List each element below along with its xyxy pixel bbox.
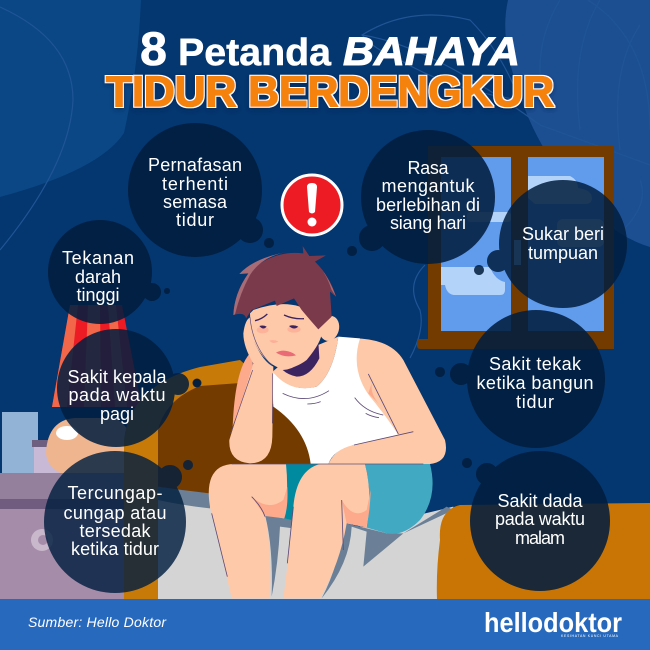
- title: [106, 22, 554, 116]
- bubble: Sakit tekak ketika bangun tidur: [435, 310, 605, 448]
- bubble: Tekanan darah tinggi: Tekanan: [62, 248, 134, 268]
- warning icon: [282, 175, 342, 235]
- bottles on dresser: [2, 412, 63, 473]
- bubble: Pernafasan terhenti semasa tidur: terhenti: [162, 174, 228, 194]
- bubble: Sakit dada pada waktu malam: malam: [515, 528, 565, 548]
- bubble: Sakit dada pada waktu malam: Sakit dada: [498, 491, 583, 511]
- bubble: Pernafasan terhenti semasa tidur: tidur: [176, 210, 214, 230]
- bubble: Sakit dada pada waktu malam: [462, 451, 610, 591]
- bubble: Sukar beri tumpuan: Sukar beri: [522, 224, 604, 244]
- bubble: Rasa mengantuk berlebihan di siang hari: siang hari: [390, 213, 466, 233]
- bubble: Tekanan darah tinggi: darah: [75, 267, 121, 287]
- source credit: Sumber: Hello Doktor: [28, 614, 167, 630]
- bubble: Tercungap-cungap atau tersedak ketika tidur: [44, 451, 193, 593]
- man sitting on bed: [209, 246, 446, 598]
- bubble: Pernafasan terhenti semasa tidur: semasa: [163, 192, 228, 212]
- bubble: Pernafasan terhenti semasa tidur: Pernafasan: [148, 155, 242, 175]
- hair: [233, 246, 336, 329]
- tank top: [272, 337, 413, 464]
- title: BAHAYA: [343, 30, 520, 74]
- bubble: Tekanan darah tinggi: [48, 220, 170, 324]
- bubble: Sakit tekak ketika bangun tidur: Sakit tekak: [489, 354, 582, 374]
- bubble: Sakit tekak ketika bangun tidur: tidur: [516, 392, 554, 412]
- bubble: Tercungap-cungap atau tersedak ketika tidur: cungap atau: [64, 503, 166, 523]
- bubble: Sakit kepala pada waktu pagi: pada waktu: [68, 385, 166, 405]
- title: Petanda: [178, 32, 332, 74]
- bubble: Rasa mengantuk berlebihan di siang hari: berlebihan di: [376, 195, 480, 215]
- logo: hellodoktor: hellodoktor: [484, 607, 622, 638]
- bubble: Tercungap-cungap atau tersedak ketika tidur: tersedak: [80, 521, 152, 541]
- bubble: Rasa mengantuk berlebihan di siang hari: [347, 130, 495, 264]
- bubble: Tekanan darah tinggi: tinggi: [76, 285, 120, 305]
- bubble: Sukar beri tumpuan: [474, 180, 627, 308]
- shorts: [284, 464, 433, 534]
- headboard: [124, 360, 330, 600]
- bubble: Sakit kepala pada waktu pagi: Sakit kepala: [68, 367, 167, 387]
- window: [417, 146, 614, 349]
- bubble: Pernafasan terhenti semasa tidur: [128, 123, 274, 257]
- logo: hellodoktor: KESIHATAN KUNCI UTAMA: [561, 634, 619, 638]
- head: [250, 304, 342, 369]
- bubble: Rasa mengantuk berlebihan di siang hari: mengantuk: [382, 176, 476, 196]
- title: 8: [140, 22, 167, 75]
- right arm: [328, 338, 446, 464]
- bubble: Tercungap-cungap atau tersedak ketika tidur: Tercungap-: [68, 483, 162, 503]
- footer bar: [0, 599, 650, 650]
- bubble: Sukar beri tumpuan: tumpuan: [528, 243, 598, 263]
- dresser: [0, 473, 124, 600]
- bubble: Tercungap-cungap atau tersedak ketika tidur: ketika tidur: [71, 539, 159, 559]
- neck and chest: [273, 337, 338, 388]
- bubble: Sakit kepala pada waktu pagi: [57, 329, 201, 447]
- title: TIDUR BERDENGKUR: [106, 68, 554, 116]
- legs: [209, 464, 371, 598]
- orange pillow: [437, 503, 650, 600]
- bed: [158, 487, 453, 600]
- bubble: Sakit dada pada waktu malam: pada waktu: [495, 509, 585, 529]
- bubble: Sakit kepala pada waktu pagi: pagi: [100, 404, 134, 424]
- background blobs and leaf outlines: [0, 0, 650, 358]
- bubble: Sakit tekak ketika bangun tidur: ketika bangun: [476, 373, 594, 393]
- lamp: [46, 305, 142, 473]
- supporting arm: [229, 317, 273, 463]
- bubble: Rasa mengantuk berlebihan di siang hari: Rasa: [408, 158, 449, 178]
